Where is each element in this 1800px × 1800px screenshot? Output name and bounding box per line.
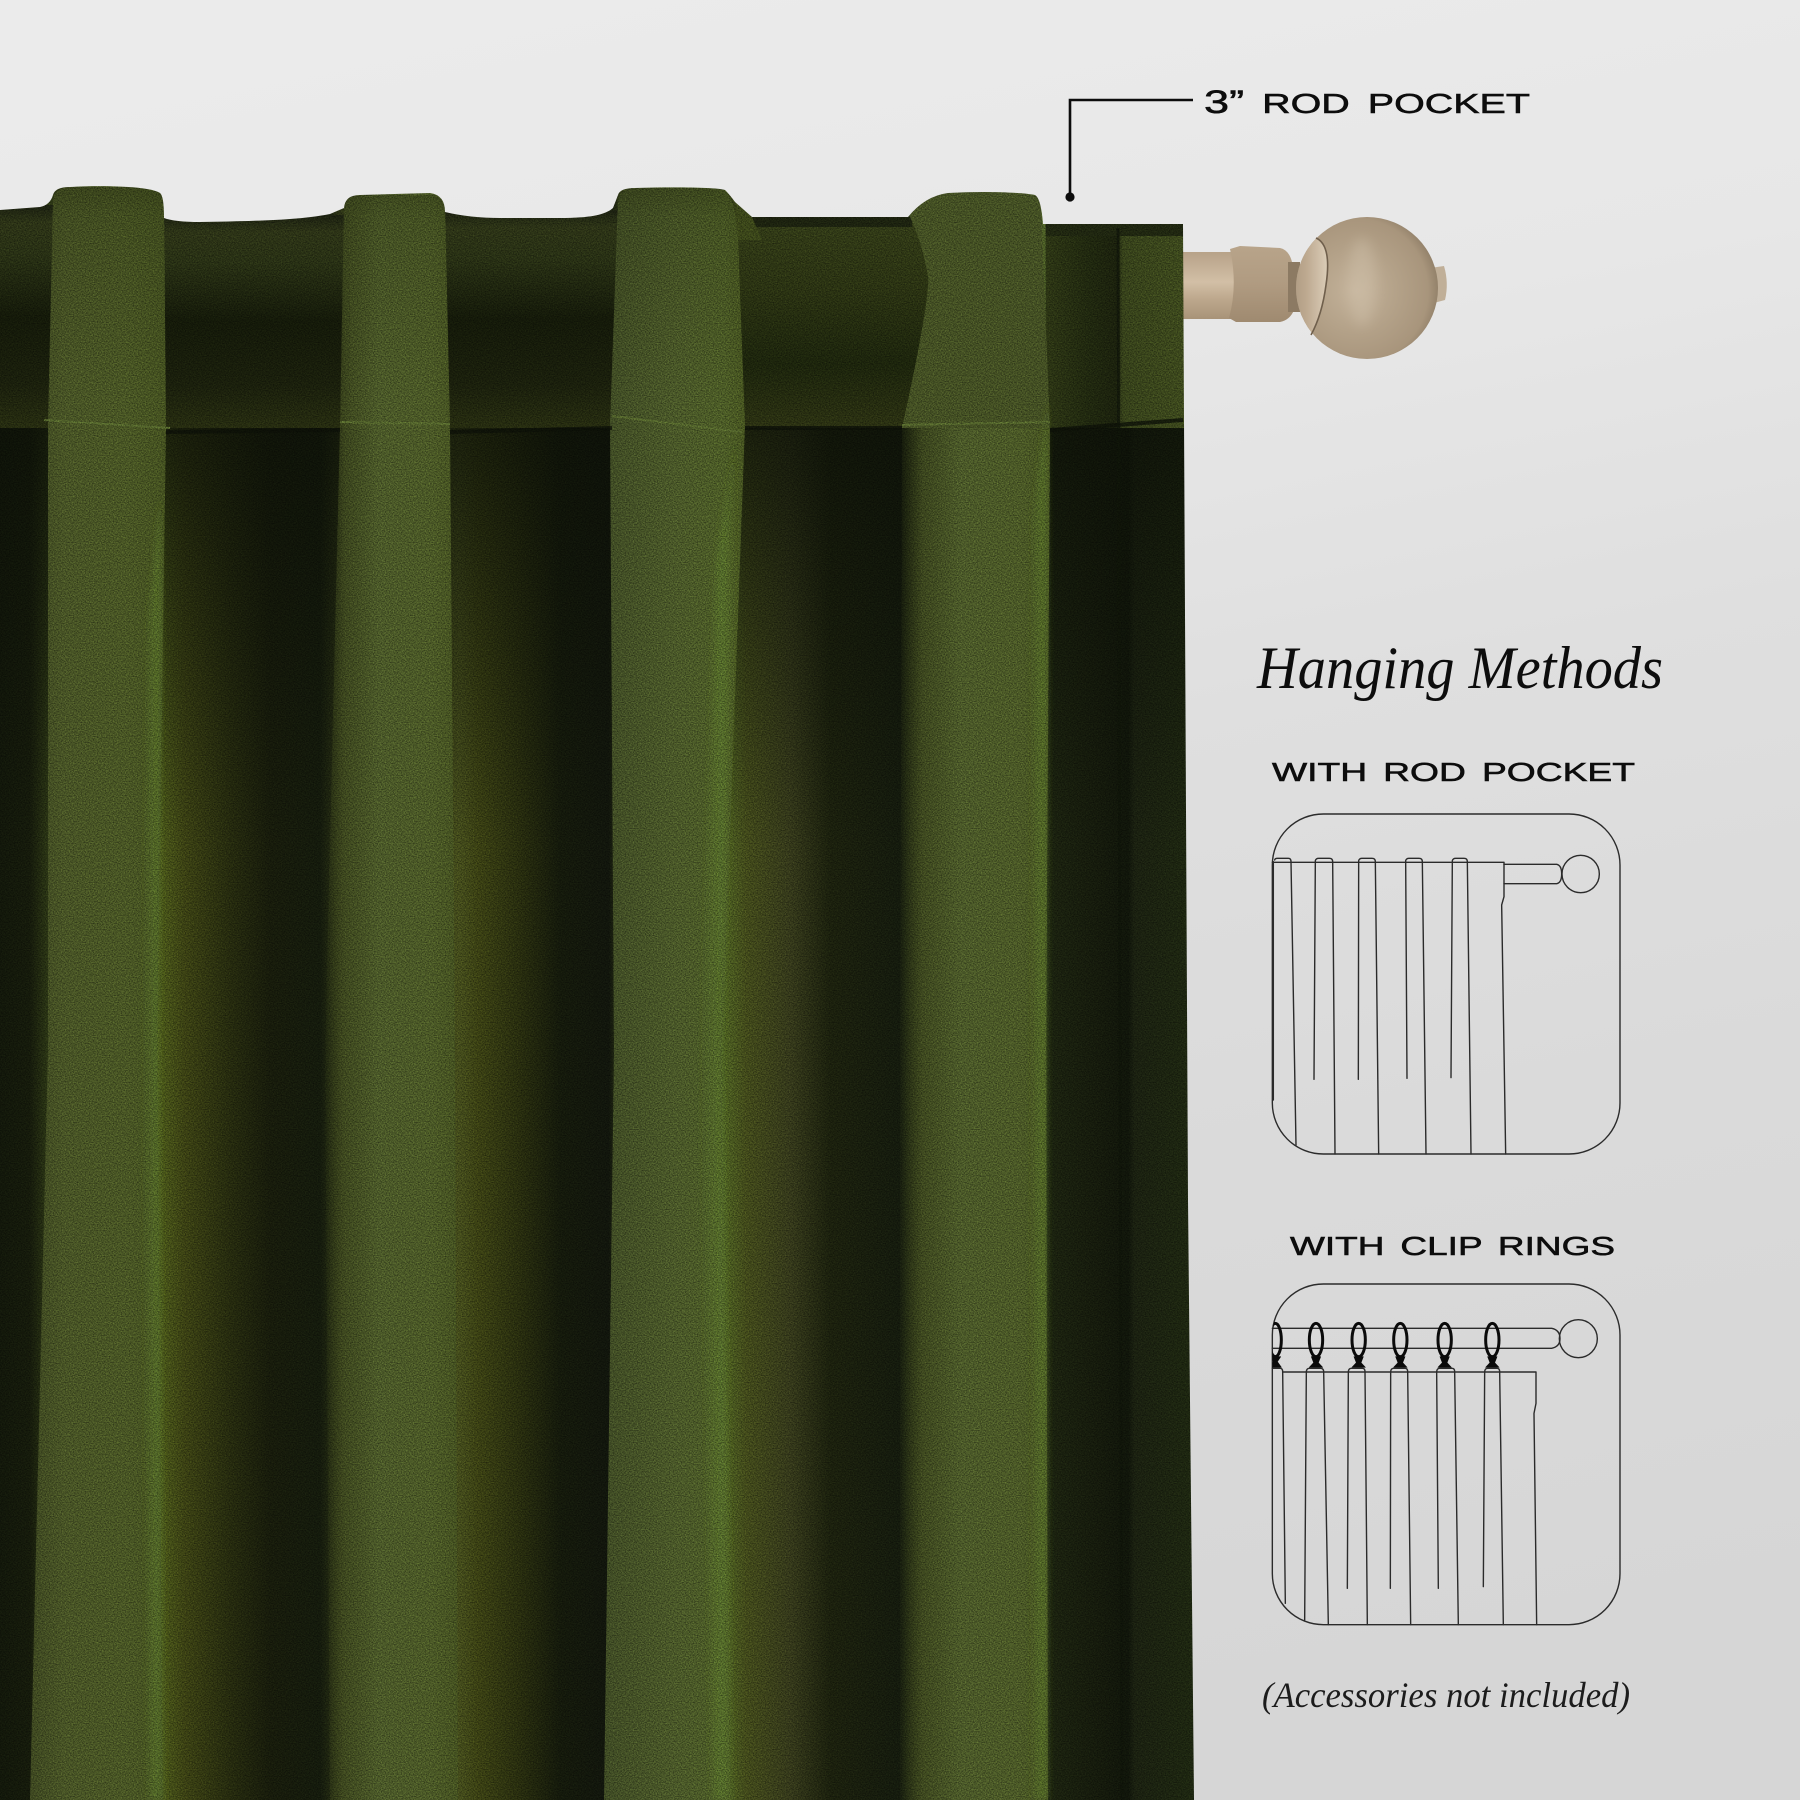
- header valley 3: [445, 210, 620, 428]
- dark top edge of valley 4: [752, 217, 912, 227]
- shoulder of pleat 3: [729, 194, 762, 240]
- sheen pleat 4: [1030, 400, 1050, 1800]
- header valley 1: [0, 205, 53, 428]
- header valley 4: [735, 215, 930, 428]
- side panel header: [1046, 224, 1186, 428]
- callout: 3 inch rod pocket: [1065, 84, 1530, 202]
- rod: [1272, 1328, 1560, 1348]
- leader line: [1070, 100, 1193, 195]
- sheen pleat 3: [700, 440, 735, 1800]
- icon frame: [1272, 814, 1620, 1154]
- pleats: [1272, 1368, 1503, 1625]
- curtain outline: [1272, 862, 1506, 1154]
- icon: clip rings diagram: [1269, 1284, 1620, 1625]
- ring 4: [1394, 1323, 1407, 1367]
- icon: rod pocket diagram: [1272, 814, 1620, 1154]
- velvet curtain: [0, 180, 1200, 1800]
- rod: [1504, 864, 1562, 884]
- finial: [1559, 1320, 1597, 1358]
- label: with rod pocket: WITH ROD POCKET: [1272, 757, 1635, 787]
- pleat 4 lower: [900, 425, 1050, 1800]
- footnote: accessories not included: (Accessories not included): [1262, 1675, 1630, 1715]
- rod: [1180, 252, 1235, 319]
- icon frame: [1272, 1284, 1620, 1625]
- pleat 4 header: [902, 192, 1050, 428]
- shadow under header: [13, 428, 1185, 800]
- pleat 3: [604, 187, 745, 1800]
- ball: [1296, 217, 1438, 359]
- neck: [1288, 262, 1300, 312]
- pleats: [1273, 858, 1471, 1154]
- heading: hanging methods: Hanging Methods: [1256, 635, 1663, 701]
- curtain outline: [1283, 1372, 1537, 1625]
- curtain base folds: [0, 180, 1200, 1800]
- pleat sheens: [142, 400, 1050, 1800]
- ring 5: [1438, 1323, 1451, 1367]
- clip rings: [1269, 1323, 1499, 1367]
- label: with clip rings: WITH CLIP RINGS: [1290, 1231, 1615, 1261]
- ball cap: [1296, 239, 1327, 332]
- header valley 2: [160, 215, 350, 428]
- callout text: 3” ROD POCKET: [1204, 84, 1530, 120]
- velvet grain: [0, 180, 1200, 1800]
- pleat 2: [325, 193, 458, 1800]
- collar: [1229, 246, 1294, 322]
- side panel top seam: [1046, 224, 1184, 236]
- ring 1: [1269, 1323, 1281, 1367]
- sheen pleat 1: [142, 500, 166, 1800]
- ring 3: [1352, 1323, 1365, 1367]
- header stitching: [44, 228, 1183, 1800]
- pleat top shading: [53, 187, 738, 294]
- ball highlight: [1348, 238, 1376, 326]
- finial: [1562, 855, 1599, 893]
- ring 2: [1309, 1323, 1323, 1367]
- cap seam: [1311, 238, 1328, 335]
- nub: [1430, 266, 1447, 304]
- curtain rod and finial: [1180, 217, 1447, 359]
- ring 6: [1486, 1323, 1499, 1367]
- leader dot: [1065, 192, 1075, 202]
- pleat 1: [30, 186, 166, 1800]
